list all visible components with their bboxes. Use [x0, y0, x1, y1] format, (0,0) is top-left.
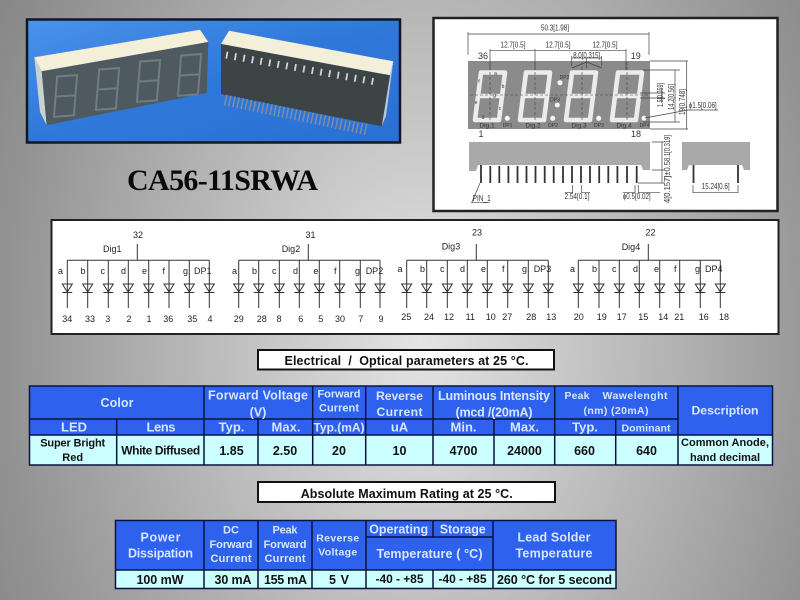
title: CA56-11SRWA	[127, 164, 318, 197]
table data row: White Diffused	[121, 444, 200, 458]
panel: dimension drawing	[434, 18, 778, 211]
schematic digit 1: 35	[187, 314, 197, 324]
table sub-header row: Max.	[272, 420, 300, 434]
table header row: Description	[692, 404, 758, 418]
rating header: Operating	[369, 523, 428, 537]
rating values: 5 V	[329, 573, 350, 587]
schematic digit 3: 27	[502, 312, 512, 322]
dimension labels: ϕ0.5[0.02]	[623, 192, 651, 201]
schematic digit 1: c	[100, 266, 106, 276]
table data row: 10	[393, 444, 406, 458]
schematic digit 1: a	[58, 266, 63, 276]
schematic digit 3: 24	[424, 312, 434, 322]
schematic digit 1: 2	[126, 314, 132, 324]
front view body with digits: DP2	[548, 123, 558, 129]
schematic digit 4: 19	[597, 312, 607, 322]
heading: electrical and optical parameters	[258, 350, 554, 370]
rating header: Reverse	[316, 532, 359, 544]
schematic digit 2: 29	[234, 314, 244, 324]
table sub-header row: Min.	[450, 420, 476, 434]
heading: absolute maximum rating	[258, 482, 555, 502]
dimension labels: 1	[478, 129, 484, 139]
rating header: Temperature ( °C)	[376, 547, 482, 561]
schematic digit 2: d	[293, 266, 298, 276]
schematic digit 4: d	[633, 264, 638, 274]
front view body with digits: DP2	[560, 75, 570, 81]
front view body with digits: c	[499, 106, 502, 112]
rating header: Voltage	[318, 546, 357, 558]
schematic digit 2: 28	[257, 314, 267, 324]
table header row: Current	[376, 405, 422, 419]
panel: circuit schematic	[52, 220, 778, 334]
table: absolute maximum rating	[116, 520, 616, 588]
table header row: Wawelenght	[602, 390, 668, 402]
schematic digit 1: g	[183, 266, 188, 276]
schematic digit 3: 13	[546, 312, 556, 322]
rating values: 30 mA	[214, 573, 252, 587]
schematic digit 2: 6	[298, 314, 303, 324]
table header row: (mcd /(20mA)	[456, 406, 532, 420]
rating header: DC	[223, 525, 239, 537]
schematic digit 4: 22	[646, 228, 656, 238]
side view with pins	[469, 142, 650, 183]
dimension labels: 36	[478, 51, 488, 61]
schematic digit 2: g	[355, 266, 360, 276]
schematic digit 3: f	[502, 264, 505, 274]
schematic digit 3: 10	[486, 312, 496, 322]
rating values: 260 °C for 5 second	[497, 573, 612, 587]
schematic digit 4: c	[612, 264, 617, 274]
table data row: Super Bright	[40, 438, 106, 450]
table header row: Luminous Intensity	[438, 389, 550, 403]
schematic digit 3: c	[440, 264, 445, 274]
rating values	[136, 572, 612, 587]
schematic digit 4: a	[570, 264, 575, 274]
schematic digit 3: 28	[526, 312, 536, 322]
schematic digit 4: f	[674, 264, 677, 274]
schematic digit 4: b	[592, 264, 597, 274]
schematic digit 3: 12	[444, 312, 454, 322]
table header row: Peak	[564, 390, 590, 402]
schematic digit 4: 15	[638, 312, 648, 322]
schematic digit 3	[398, 228, 556, 322]
table header row: Forward	[318, 389, 360, 401]
schematic digit 1: 1	[146, 314, 152, 324]
table data row: 24000	[507, 444, 542, 458]
schematic digit 2	[232, 230, 385, 324]
schematic digit 2: 31	[306, 230, 316, 240]
schematic digit 4: 21	[674, 312, 684, 322]
front view body with digits: Dig.2	[525, 122, 541, 130]
schematic digit 3: 11	[466, 312, 475, 322]
rating header: Current	[210, 553, 252, 565]
rating header: Forward	[264, 539, 306, 551]
front view body with digits: DP4	[640, 123, 650, 129]
schematic digit 4: Dig4	[622, 242, 640, 252]
schematic digit 1: 4	[207, 314, 213, 324]
rating header	[128, 523, 593, 565]
schematic digit 4: DP4	[705, 264, 723, 274]
dimension labels: 14.2[0.56]	[667, 84, 676, 110]
table sub-header row: Typ.(mA)	[314, 420, 364, 434]
front view body with digits: d	[482, 115, 485, 121]
schematic digit 3: Dig3	[442, 242, 460, 252]
schematic digit 1: f	[162, 266, 166, 276]
table sub-header row: Typ.	[572, 420, 598, 434]
table header row: (nm) (20mA)	[584, 405, 648, 417]
schematic digit 1: 34	[62, 314, 72, 324]
schematic digit 3: a	[398, 264, 403, 274]
rating values: -40 - +85	[438, 572, 487, 586]
table data row: 4700	[450, 444, 477, 458]
schematic digit 3: d	[460, 264, 465, 274]
table sub-header row: Lens	[146, 420, 176, 434]
rating values: 155 mA	[264, 573, 307, 587]
dimension labels: 12.7[0.5]	[500, 41, 526, 50]
front view body with digits: f	[478, 79, 480, 85]
schematic digit 2: b	[252, 266, 257, 276]
dimension labels: ϕ1.5[0.06]	[689, 101, 717, 110]
schematic digit 2: f	[334, 266, 337, 276]
schematic digit 4	[570, 228, 729, 322]
right display module, rear view	[221, 31, 393, 130]
table data row: 1.85	[219, 444, 244, 458]
front view body with digits: g	[493, 93, 496, 99]
dimension labels: 12.7[0.5]	[546, 41, 570, 50]
front view body with digits: a	[494, 71, 497, 77]
table: electrical and optical parameters	[30, 386, 772, 465]
schematic digit 3: 23	[472, 228, 482, 238]
front view body with digits: DP3	[550, 98, 560, 104]
front view body with digits	[468, 61, 650, 130]
table header row: Color	[100, 396, 134, 410]
table data row: 2.50	[273, 444, 297, 458]
rating header: Dissipation	[128, 546, 193, 560]
schematic digit 2: Dig2	[282, 244, 300, 254]
rating header: Lead Solder	[518, 530, 591, 544]
dimension lines	[468, 32, 738, 203]
schematic digit 3: e	[481, 264, 486, 274]
schematic digit 4: 17	[617, 312, 627, 322]
rating header: Temperature	[516, 546, 593, 560]
dimension labels: 4[0.157]±0.5	[663, 160, 672, 203]
table sub-header row: Max.	[510, 420, 539, 434]
dimension labels: 15.24[0.6]	[702, 182, 730, 191]
front view body with digits: DP1	[503, 123, 513, 129]
dimension labels: 19	[631, 51, 641, 61]
table header row: Current	[319, 403, 359, 415]
dimension labels: 18	[631, 129, 641, 139]
dimension labels: 8.0[0.315]	[573, 51, 600, 60]
left display module	[34, 30, 208, 125]
schematic digit 2: c	[272, 266, 277, 276]
schematic digit 2: 8	[276, 314, 282, 324]
heading: absolute maximum rating: Absolute Maximum Rating at 25 °C.	[301, 487, 513, 501]
table sub-header row: Dominant	[622, 422, 671, 434]
front view body with digits: Dig.3	[571, 122, 587, 130]
schematic digit 2: 5	[318, 314, 323, 324]
schematic digit 2: DP2	[366, 266, 383, 276]
dimension labels: 12.7[0.5]	[592, 41, 618, 50]
front view body with digits: DP3	[594, 123, 604, 129]
schematic digit 2: 9	[378, 314, 384, 324]
schematic digit 1: d	[121, 266, 126, 276]
table data row: hand decimal	[690, 452, 760, 464]
front view body with digits: Dig.1	[479, 122, 495, 130]
rating header: Current	[264, 553, 306, 565]
front view body with digits: b	[502, 84, 505, 90]
rating header: Peak	[272, 525, 298, 537]
schematic digit 1: 32	[133, 230, 143, 240]
schematic digit 2: 30	[335, 314, 345, 324]
rating values: -40 - +85	[376, 572, 424, 586]
rating header: Forward	[210, 539, 252, 551]
heading: electrical and optical parameters: Electrical / Optical parameters at 25 °C.	[284, 354, 528, 368]
schematic digit 3: 25	[401, 312, 411, 322]
table sub-header row: LED	[61, 420, 87, 434]
schematic digit 3: DP3	[534, 264, 551, 274]
schematic digit 2: a	[232, 266, 237, 276]
schematic digit 1: DP1	[194, 266, 212, 276]
rating values: 100 mW	[136, 573, 184, 587]
dimension labels: 50.3[1.98]	[541, 24, 569, 33]
schematic digit 1	[58, 230, 214, 324]
table data row: 20	[332, 444, 346, 458]
dimension labels: 1.5[0.059]	[656, 83, 665, 107]
rating header: Power	[140, 530, 181, 544]
schematic digit 4: e	[654, 264, 659, 274]
schematic digit 4: 18	[719, 312, 729, 322]
dimension labels: PIN_1	[473, 194, 491, 203]
table header row: Reverse	[376, 389, 423, 403]
schematic digit 2: e	[314, 266, 319, 276]
schematic digit 1: 3	[105, 314, 110, 324]
table sub-header row: Typ.	[219, 420, 244, 434]
table data row: 640	[636, 444, 657, 458]
front view body with digits: Dig.4	[616, 122, 632, 130]
schematic digit 1: e	[142, 266, 147, 276]
schematic digit 1: b	[80, 266, 86, 276]
schematic digit 2: 7	[358, 314, 363, 324]
table sub-header row	[61, 420, 671, 434]
end view with pins	[682, 142, 750, 183]
dimension labels	[473, 24, 730, 203]
schematic digit 1: 36	[163, 314, 173, 324]
table data row	[40, 437, 769, 464]
schematic digit 4: 16	[699, 312, 709, 322]
schematic digit 4: 14	[658, 312, 668, 322]
schematic digit 3: g	[522, 264, 527, 274]
table data row: Red	[62, 452, 83, 464]
table data row: Common Anode,	[681, 437, 769, 449]
panel: product photo	[27, 20, 400, 142]
table header row: Forward Voltage	[208, 388, 308, 402]
schematic digit 4: 20	[574, 312, 584, 322]
schematic digit 4: g	[695, 264, 700, 274]
schematic digit 1: 33	[85, 314, 95, 324]
front view body with digits: e	[475, 100, 478, 106]
table header row	[100, 388, 758, 420]
table data row: 660	[574, 444, 595, 458]
table header row: (V)	[250, 406, 266, 420]
schematic digit 1: Dig1	[103, 244, 122, 254]
table sub-header row: uA	[391, 420, 409, 434]
rating header: Storage	[440, 523, 486, 537]
schematic digit 3: b	[420, 264, 425, 274]
dimension labels: 2.54[0.1]	[564, 192, 590, 201]
dimension labels: 19[0.748]	[678, 89, 687, 115]
dimension labels: 8.1[0.319]	[663, 135, 672, 161]
